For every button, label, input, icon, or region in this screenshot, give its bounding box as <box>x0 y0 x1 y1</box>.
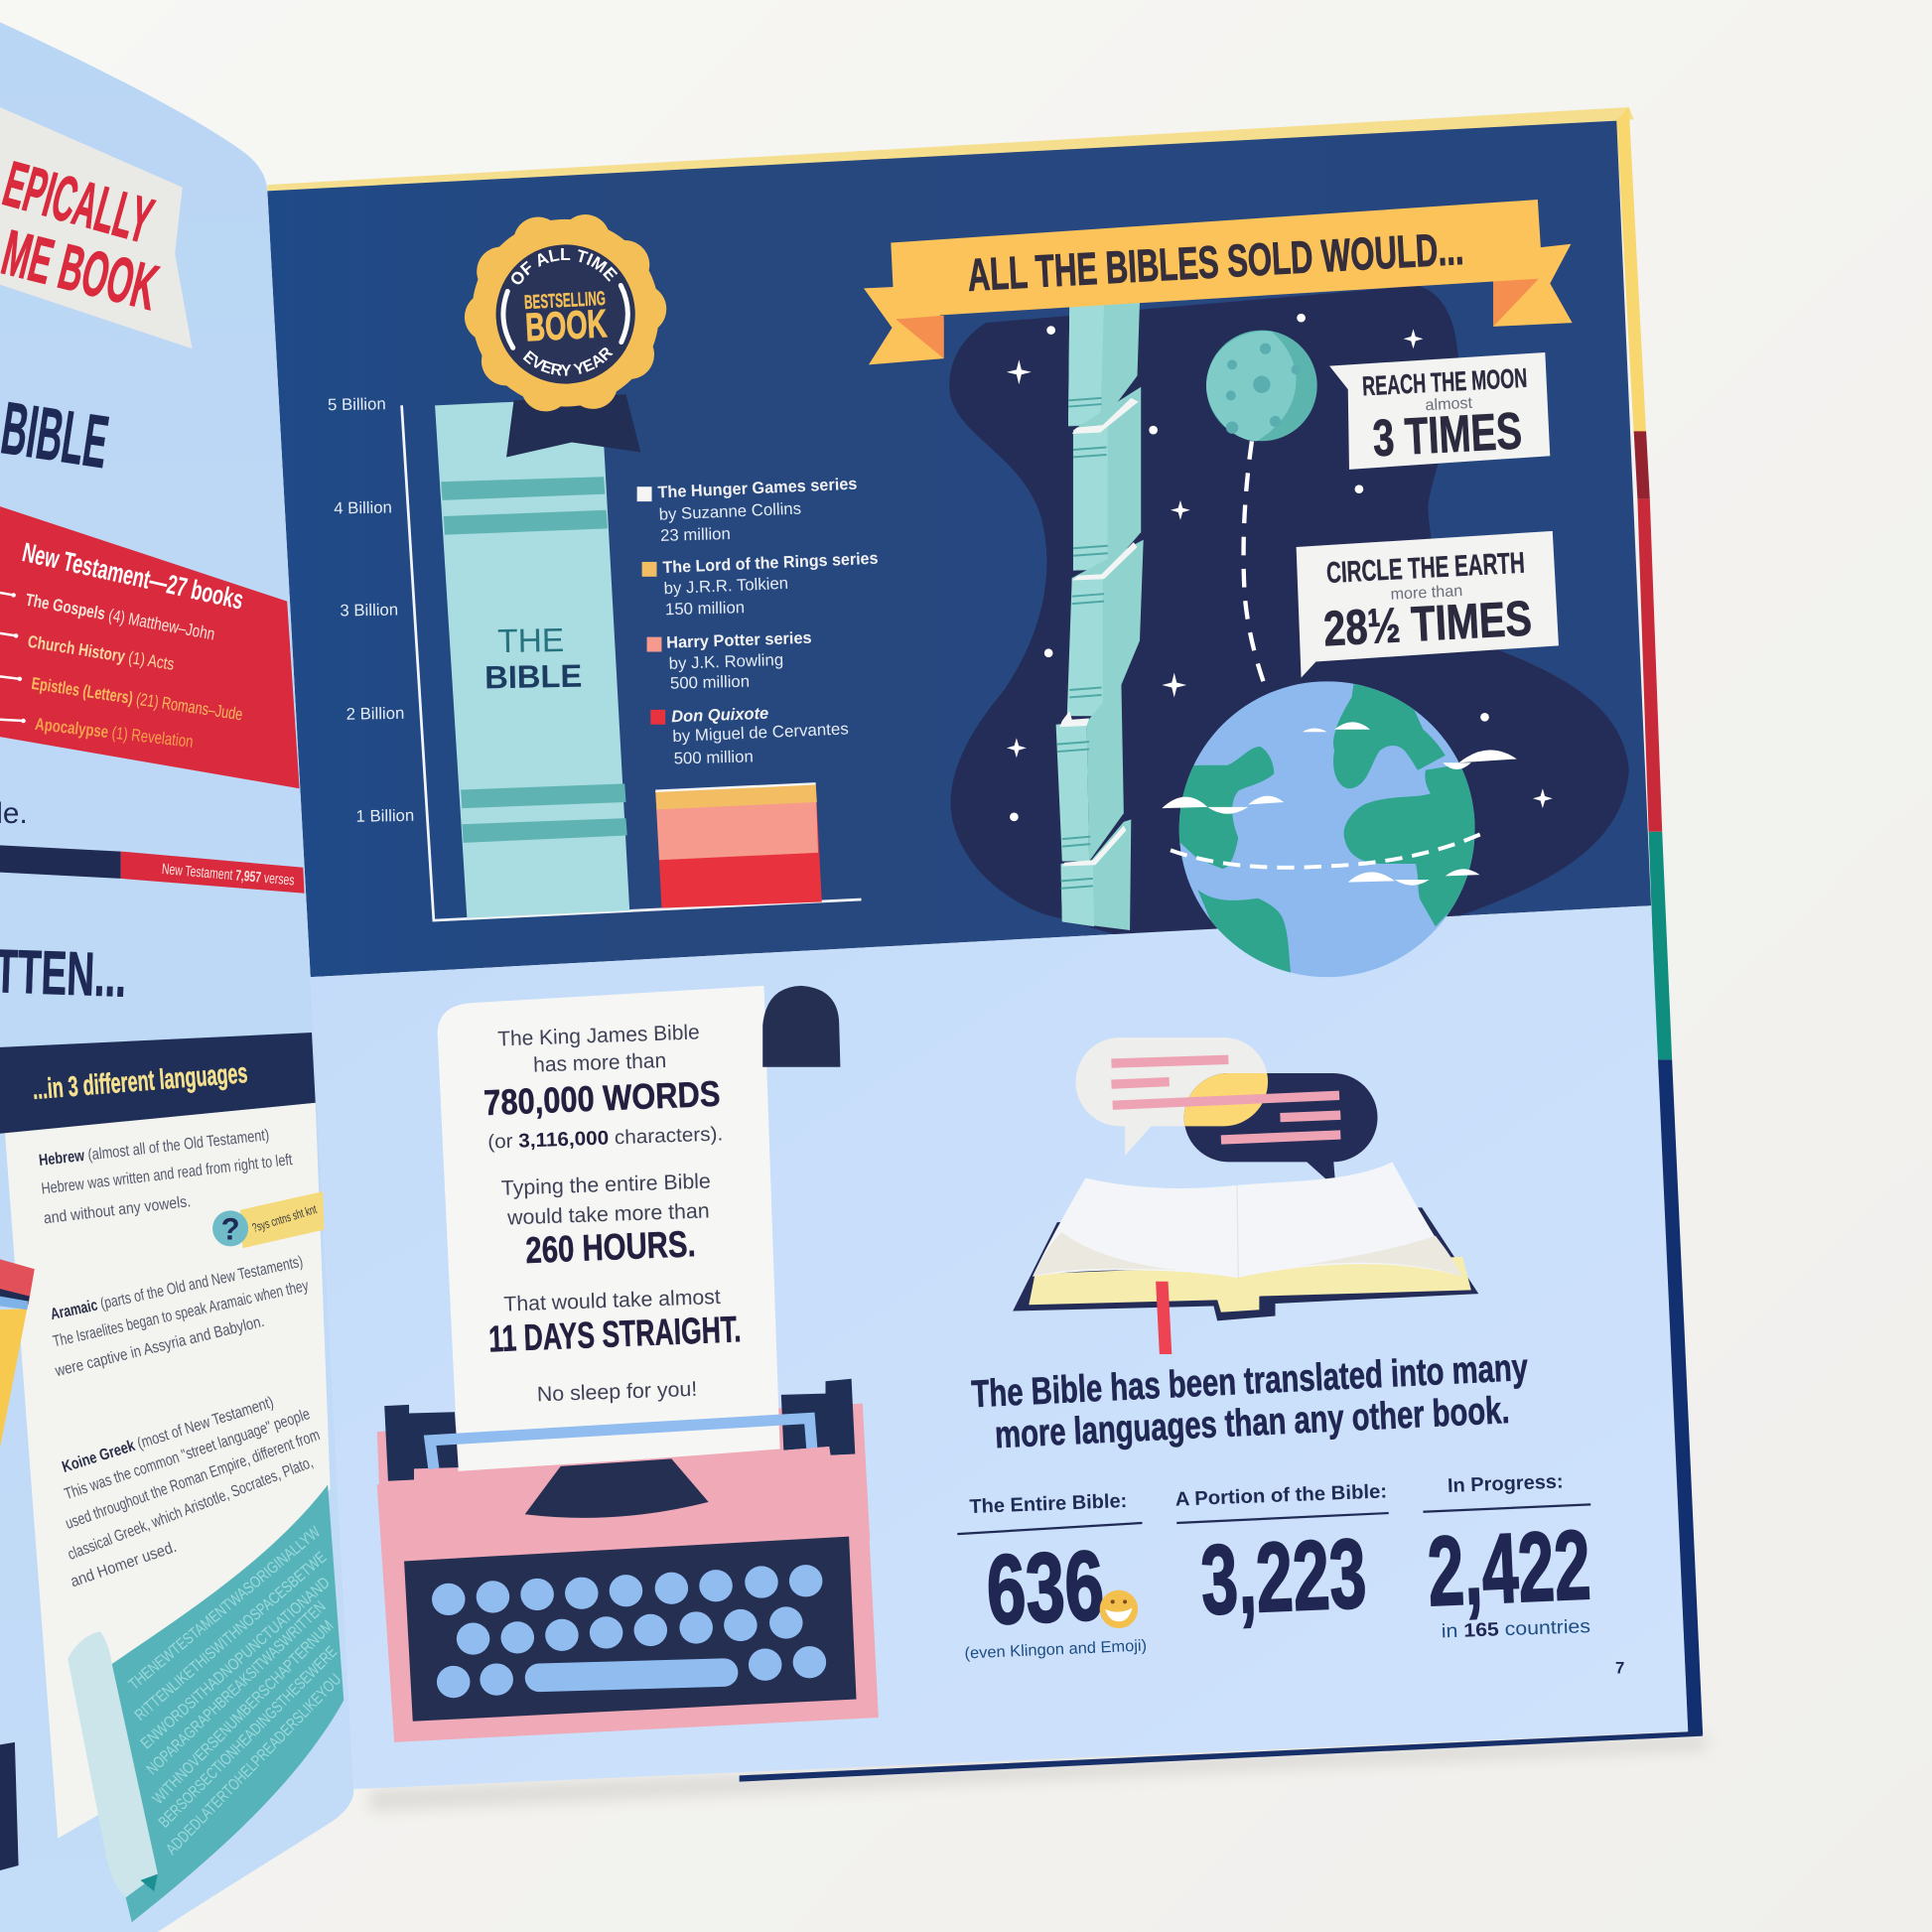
icon: scroll: NOPARAGRAPHBREAKSITWASWRITTEN <box>143 1597 330 1778</box>
right page cover edges <box>267 107 1703 1782</box>
icon: moon <box>1206 331 1317 441</box>
panel: three languages <box>0 1033 331 1839</box>
chart y axis labels: 5 Billion <box>328 394 386 414</box>
bar: the Bible spine: BIBLE <box>484 658 583 695</box>
stat: in progress: In Progress: <box>1448 1470 1564 1497</box>
icon: bestselling badge: EVERY YEAR <box>522 347 614 375</box>
typewriter front body <box>377 1447 879 1742</box>
callout: circle the earth: CIRCLE THE EARTH <box>1325 547 1526 590</box>
panel: New Testament books: Epistles (Letters) (21) Romans–Jude <box>30 673 244 724</box>
illustration: open Bible with speech bubbles <box>1013 1037 1478 1354</box>
icon: bestselling badge: OF ALL TIME <box>511 248 618 284</box>
legend: Lord of the Rings: by J.R.R. Tolkien <box>663 574 788 598</box>
callout: reach the moon: REACH THE MOON <box>1361 362 1528 401</box>
panel: New Testament books <box>0 506 300 788</box>
bar: the Bible spine <box>435 398 629 918</box>
icon: scroll: WITHNOVERSENUMBERSCHAPTERNUM <box>149 1617 338 1808</box>
stat: a portion of the Bible: A Portion of the Bible: <box>1174 1480 1387 1511</box>
arrow: dashed path to the moon <box>1244 441 1269 697</box>
typewriter carriage <box>384 1379 855 1481</box>
icon: bestselling badge: BOOK <box>524 302 609 349</box>
legend: Harry Potter: by J.K. Rowling <box>668 650 783 673</box>
icon: scroll: ADDEDLATERTOHELPREADERSLIKEYOU <box>163 1671 345 1859</box>
panel: typed paper: (or 3,116,000 characters). <box>487 1123 724 1154</box>
panel: three languages: Hebrew (almost all of the Old Testament) <box>38 1126 270 1170</box>
chart y axis labels: 1 Billion <box>355 806 414 826</box>
legend: Hunger Games <box>637 475 858 545</box>
panel: New Testament books: New Testament—27 books <box>20 536 246 616</box>
open book <box>1013 1162 1478 1320</box>
icon: clouds <box>1162 722 1517 886</box>
heading: translated into many languages: more languages than any other book. <box>994 1389 1510 1456</box>
icon: bestselling badge: BESTSELLING <box>523 288 606 314</box>
icon: stars <box>1007 314 1553 821</box>
icon: scroll: THENEWTESTAMENTWASORIGINALLYW <box>125 1523 325 1694</box>
panel: typed paper: 260 HOURS. <box>525 1222 696 1271</box>
chart y axis labels <box>328 394 414 826</box>
light lower panel <box>311 905 1688 1789</box>
banner: epically awesome book: EPICALLY <box>0 148 160 257</box>
illustration: typewriter <box>377 986 879 1742</box>
icon: scroll <box>68 1484 345 1922</box>
chart y axis labels: 3 Billion <box>340 601 398 621</box>
typewriter keyboard <box>404 1537 857 1722</box>
panel: three languages: Hebrew was written and read from right to left <box>41 1151 294 1198</box>
stat: the entire Bible <box>957 1490 1147 1662</box>
panel: three languages: and without any vowels. <box>43 1192 192 1227</box>
white speech bubble <box>1075 1037 1268 1156</box>
legend: Don Quixote: 500 million <box>673 747 754 767</box>
illustration: space <box>1007 302 1559 980</box>
panel: three languages: classical Greek, which Aristotle, Socrates, Plato, <box>66 1453 316 1564</box>
legend: Don Quixote: Don Quixote <box>671 704 769 726</box>
callout: circle the earth <box>1297 531 1559 678</box>
panel: New Testament books: The Gospels (4) Matthew–John <box>24 590 216 644</box>
verse bar: New Testament 7,957 verses <box>161 862 295 890</box>
bookmark ribbon <box>1156 1282 1172 1354</box>
chart: bestselling books <box>328 214 918 921</box>
icon: question tag: ? <box>221 1212 240 1247</box>
typewriter back body <box>377 1404 870 1553</box>
paper scroll tab <box>762 986 840 1067</box>
callout: reach the moon <box>1329 352 1550 470</box>
banner: all the Bibles sold would: ALL THE BIBLES SOLD WOULD... <box>966 222 1464 301</box>
stat: the entire Bible: The Entire Bible: <box>969 1490 1128 1518</box>
banner: epically awesome book <box>0 107 193 348</box>
left page <box>0 22 353 1932</box>
icon: earth <box>1179 681 1475 977</box>
icon: scroll: BERSORSECTIONHEADINGSTHESEWERE <box>155 1643 341 1832</box>
callout: circle the earth: more than <box>1390 582 1463 604</box>
typewriter roller guide <box>525 1458 709 1518</box>
stat: the entire Bible: (even Klingon and Emoji) <box>964 1636 1147 1662</box>
callout: circle the earth: 28½ TIMES <box>1322 590 1533 656</box>
speech bubble lines <box>1111 1059 1340 1140</box>
stat: a portion of the Bible <box>1174 1480 1389 1636</box>
panel: typed paper: That would take almost <box>503 1286 721 1316</box>
chart y axis labels: 2 Billion <box>345 704 404 724</box>
panel: three languages: Koine Greek (most of New Testament) <box>60 1393 276 1476</box>
icon: question tag <box>212 1191 324 1248</box>
icon: pencil <box>0 1259 35 1448</box>
panel: three languages: and Homer used. <box>69 1538 179 1590</box>
panel: three languages: used throughout the Roman Empire, different from <box>64 1426 322 1533</box>
legend: Harry Potter <box>647 628 812 693</box>
chart y axis labels: 4 Billion <box>334 498 392 518</box>
legend: Don Quixote <box>650 704 849 767</box>
panel: typed paper: has more than <box>533 1049 667 1077</box>
navy speech bubble <box>1184 1073 1378 1187</box>
left page sheet <box>0 22 353 1932</box>
chart axes <box>402 405 862 920</box>
navy block <box>0 1742 19 1870</box>
page number: 7 <box>1615 1658 1624 1677</box>
icon: scroll: RITTENLIKETHISWITHNOSPACESBETWE <box>131 1548 331 1725</box>
banner: epically awesome book: ME BOOK <box>0 216 165 324</box>
icon: question tag: ?sys cntns sht knt <box>250 1202 319 1235</box>
legend: Lord of the Rings: The Lord of the Rings series <box>662 549 879 577</box>
legend: Harry Potter: 500 million <box>670 672 750 693</box>
panel: New Testament books: Apocalypse (1) Revelation <box>34 714 195 752</box>
legend: Don Quixote: by Miguel de Cervantes <box>672 719 849 746</box>
panel: three languages: Aramaic (parts of the Old and New Testaments) <box>49 1253 305 1323</box>
bar: stacked other books <box>655 783 822 908</box>
icon: scroll: ENWORDSITHADNOPUNCTUATIONAND <box>137 1574 334 1752</box>
panel: three languages: ...in 3 different languages <box>32 1057 249 1106</box>
legend: Harry Potter: Harry Potter series <box>666 628 812 652</box>
callout: reach the moon: almost <box>1425 394 1473 414</box>
panel: three languages: This was the common "street language" people <box>63 1405 312 1503</box>
stat: the entire Bible: 636 <box>984 1531 1106 1646</box>
panel: New Testament books: Church History (1) Acts <box>27 631 176 674</box>
panel: typed paper: 780,000 WORDS <box>483 1073 721 1123</box>
callout: reach the moon: 3 TIMES <box>1371 402 1523 468</box>
legend: Hunger Games: by Suzanne Collins <box>658 498 801 524</box>
stat: in progress: in 165 countries <box>1441 1616 1590 1642</box>
panel: three languages: were captive in Assyria and Babylon. <box>53 1312 266 1380</box>
stat: a portion of the Bible: 3,223 <box>1198 1519 1368 1636</box>
panel: typed paper <box>438 986 780 1473</box>
panel: typed paper: would take more than <box>506 1199 710 1229</box>
verse bar <box>0 845 305 894</box>
left page: BIBLE <box>0 386 113 483</box>
arrow: dashed orbit around the earth <box>1171 833 1483 868</box>
space background blob <box>949 286 1629 955</box>
legend: Hunger Games: The Hunger Games series <box>657 475 858 501</box>
legend: Hunger Games: 23 million <box>660 524 731 545</box>
navy upper panel <box>267 121 1651 977</box>
heading: translated into many languages <box>971 1346 1529 1456</box>
legend: Lord of the Rings: 150 million <box>665 598 745 619</box>
legend: Lord of the Rings <box>642 549 879 619</box>
heading: translated into many languages: The Bible has been translated into many <box>971 1346 1529 1416</box>
icon: badge ribbon <box>506 394 640 457</box>
panel: three languages: The Israelites began to speak Aramaic when they <box>52 1277 311 1350</box>
panel: typed paper: 11 DAYS STRAIGHT. <box>487 1308 742 1359</box>
icon: bestselling badge <box>465 214 667 411</box>
bar: the Bible spine: THE <box>497 622 565 660</box>
icon: stack of Bibles reaching the moon <box>1056 302 1144 930</box>
panel: typed paper: No sleep for you! <box>537 1378 698 1406</box>
icon: smiling emoji <box>1100 1590 1138 1628</box>
stat: in progress <box>1423 1470 1592 1642</box>
panel: typed paper: Typing the entire Bible <box>501 1170 711 1200</box>
stat: in progress: 2,422 <box>1426 1510 1592 1627</box>
banner: all the Bibles sold would <box>864 200 1573 364</box>
panel: typed paper: The King James Bible <box>497 1021 700 1050</box>
